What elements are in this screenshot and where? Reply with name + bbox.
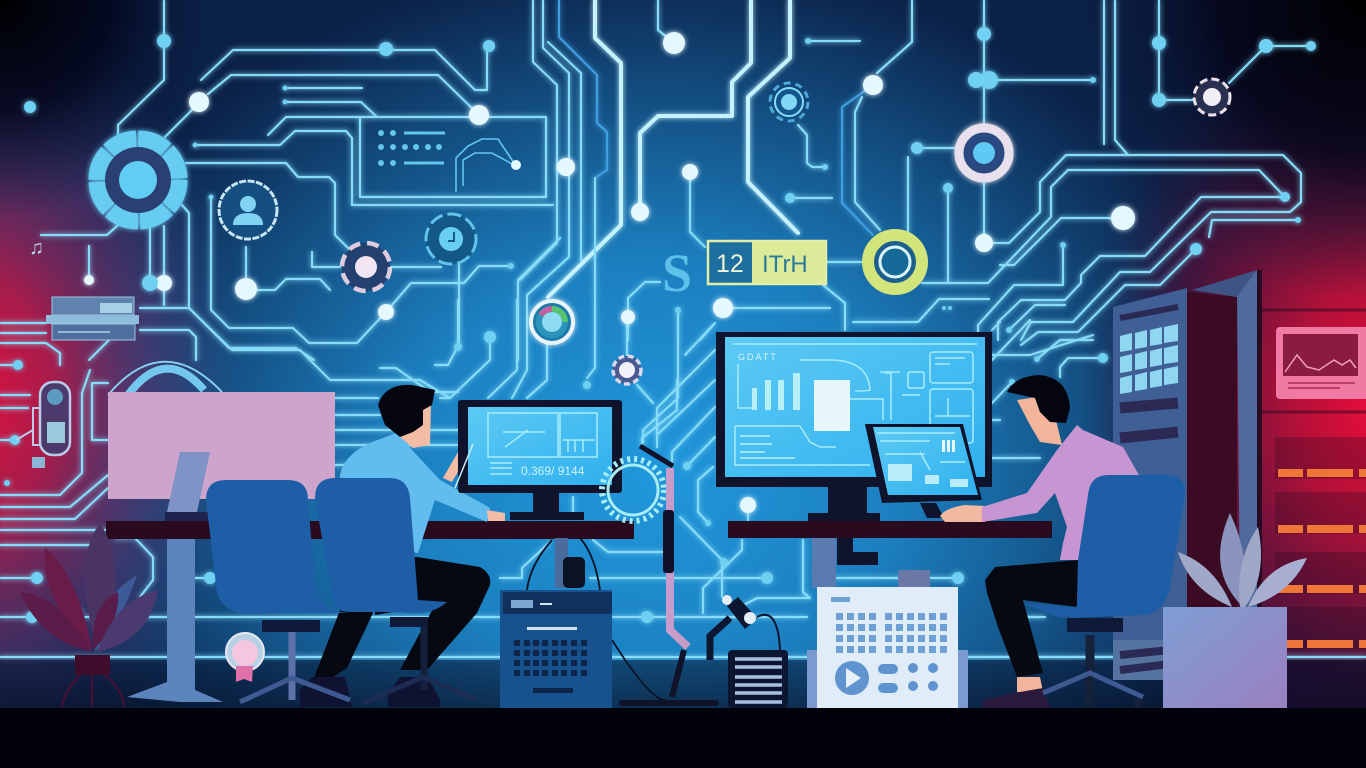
laptop right — [865, 424, 982, 518]
right server wall — [1262, 310, 1366, 708]
icon: user badge — [219, 181, 277, 239]
laptop left — [165, 452, 210, 521]
floor strip below wall line — [0, 660, 1366, 710]
chair: right — [1023, 475, 1185, 708]
icon: stacked device — [46, 297, 139, 340]
icon: large ring right — [959, 128, 1009, 178]
label: 12 ITrH sign — [708, 241, 826, 284]
server rack: door and shelves — [1113, 270, 1263, 708]
label: S glyph: S — [662, 243, 692, 303]
icon: top right dashed node — [1194, 79, 1230, 115]
plant: left — [20, 523, 158, 707]
trace nodes — [4, 27, 1316, 623]
monitor: large right: GDATT — [738, 352, 778, 362]
monitor: center: 0.369/ 9144 — [521, 464, 585, 478]
icon: clock ring — [426, 214, 476, 264]
icon: green ring — [868, 235, 922, 289]
chair: left back — [206, 480, 350, 702]
label: 12 ITrH sign: ITrH — [762, 251, 808, 278]
icon: large gear left — [97, 139, 179, 221]
icon: dashed ring node — [342, 243, 390, 291]
desk left — [106, 521, 634, 702]
chair: left front — [315, 478, 477, 703]
speaker device — [710, 595, 788, 708]
person: right engineer — [940, 375, 1140, 708]
person: left engineer — [300, 385, 505, 707]
large pink screen left — [108, 392, 335, 499]
monitor: large right — [716, 332, 992, 522]
device: tower under left desk — [500, 538, 665, 708]
chart panel inside trace box — [378, 130, 521, 192]
icon: left outlined device — [16, 382, 70, 468]
icon: small dashed node — [613, 356, 641, 384]
icon: music note: ♫ — [29, 237, 44, 259]
pink chart monitor — [1276, 327, 1366, 399]
label: 12 ITrH sign: 12 — [716, 250, 744, 278]
plant: right — [1163, 513, 1307, 708]
microphone stand — [622, 446, 716, 703]
icon: pie ring — [531, 301, 573, 343]
icon: top gear node — [770, 83, 808, 121]
desk right — [728, 521, 1052, 588]
floor — [0, 708, 1366, 768]
device: white console — [807, 570, 968, 708]
monitor: center — [455, 400, 622, 520]
arch behind monitor — [108, 362, 222, 395]
icon: glowing pink badge — [226, 633, 264, 682]
cogwheel by microphone — [602, 459, 664, 521]
